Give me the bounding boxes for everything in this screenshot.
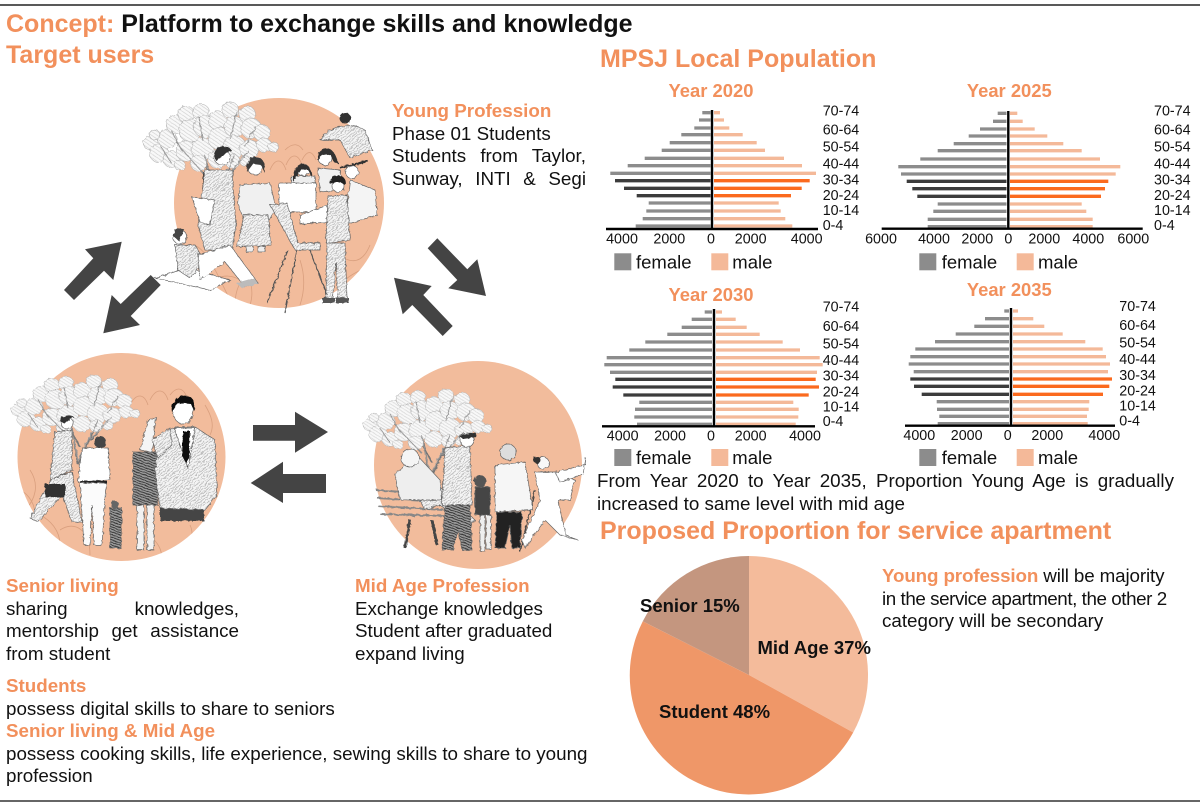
pyramid chart: year 2030: 2000	[735, 429, 767, 445]
pyramid chart: year 2020: 4000	[791, 231, 823, 247]
text block: skills exchange: possess digital skills to share to seniors	[6, 698, 335, 719]
pyramid chart: year 2035: 4000	[1088, 428, 1120, 444]
text block: senior living	[6, 575, 239, 664]
pyramid chart: year 2020: 60-64	[823, 122, 859, 138]
pyramid chart: year 2025: 50-54	[1154, 140, 1191, 156]
pyramid chart: year 2035: 50-54	[1119, 335, 1156, 351]
pyramid chart: year 2035: 2000	[951, 428, 983, 444]
pyramid chart: year 2025: 20-24	[1154, 188, 1191, 204]
text block: young profession: Students from Taylor,	[392, 145, 586, 166]
text block: skills exchange: Students	[6, 675, 86, 696]
top border line	[0, 4, 1200, 6]
pyramid chart: year 2020: female	[636, 251, 692, 272]
pyramid chart: year 2030: 4000	[789, 429, 821, 445]
text block: young profession	[392, 100, 586, 189]
pyramid chart: year 2020: male	[732, 251, 772, 272]
text block: mid age profession: Mid Age Profession	[355, 575, 530, 596]
pie chart: proposed proportion: Student 48%	[659, 701, 770, 722]
pyramid chart: year 2035: 4000	[903, 428, 935, 444]
pyramid chart: year 2030: 2000	[654, 429, 686, 445]
pyramid chart: year 2025: 6000	[865, 231, 897, 247]
text block: mid age profession	[355, 575, 552, 664]
chart title 2025: Year 2025	[967, 80, 1052, 101]
chart title 2035: Year 2035	[967, 279, 1052, 300]
text block: population finding: increased to same level with mid age	[597, 493, 905, 514]
pyramid chart: year 2035: 10-14	[1119, 399, 1156, 415]
pyramid chart: year 2020: 0	[707, 231, 715, 247]
text block: proportion note: category will be secondary	[882, 610, 1103, 631]
pyramid chart: year 2025: 10-14	[1154, 203, 1191, 219]
pyramid chart: year 2030: 60-64	[823, 319, 859, 335]
arrow: down right to mid age	[428, 238, 486, 296]
pyramid chart: year 2025: 0-4	[1154, 218, 1175, 234]
heading: population: MPSJ Local Population	[600, 45, 876, 73]
pyramid chart: year 2035: 0-4	[1119, 413, 1140, 429]
illustration: senior living group	[11, 353, 226, 561]
pyramid chart: year 2035: 0	[1004, 428, 1012, 444]
text block: mid age profession: expand living	[355, 643, 465, 664]
pyramid chart: year 2025: 6000	[1117, 231, 1149, 247]
pyramid chart: year 2020: 70-74	[823, 104, 859, 120]
pyramid chart: year 2020: 20-24	[823, 188, 859, 204]
pie chart: proposed proportion: Mid Age 37%	[758, 637, 871, 658]
text block: senior living: mentorship get assistance	[6, 620, 239, 641]
chart title 2020: Year 2020	[669, 80, 753, 101]
pyramid chart: year 2030: 0-4	[823, 414, 843, 430]
arrow: left to senior living	[251, 462, 326, 503]
pyramid chart: year 2025: 4000	[918, 231, 950, 247]
pyramid chart: year 2025: 2000	[1028, 231, 1060, 247]
pyramid chart: year 2030: 70-74	[823, 300, 859, 316]
pyramid chart: year 2025: 70-74	[1154, 104, 1191, 120]
pyramid chart: year 2025	[865, 80, 1191, 272]
pyramid chart: year 2030: 0	[707, 429, 715, 445]
text block: population finding: From Year 2020 to Year 2035, Proportion Young Age is gradually	[597, 470, 1174, 491]
pyramid chart: year 2035: 70-74	[1119, 299, 1156, 315]
pyramid chart: year 2020: 30-34	[823, 172, 859, 188]
pyramid chart: year 2030: 50-54	[823, 336, 859, 352]
pyramid chart: year 2035: 40-44	[1119, 352, 1156, 368]
pyramid chart: year 2025: 30-34	[1154, 172, 1191, 188]
pyramid chart: year 2025: male	[1038, 251, 1078, 272]
text block: mid age profession: Student after graduated	[355, 620, 552, 641]
pyramid chart: year 2025: female	[942, 251, 997, 272]
pyramid chart: year 2020: 50-54	[823, 140, 859, 156]
pyramid chart: year 2025: 40-44	[1154, 156, 1191, 172]
main title: Concept: Platform to exchange skills and knowledge	[6, 10, 633, 38]
pyramid chart: year 2030: 4000	[607, 429, 639, 445]
pie chart: proposed proportion: Senior 15%	[640, 595, 740, 616]
pyramid chart: year 2035: 30-34	[1119, 368, 1156, 384]
chart title 2030: Year 2030	[669, 284, 753, 305]
pyramid chart: year 2035	[903, 279, 1156, 468]
heading: proposed proportion: Proposed Proportion for service apartment	[600, 517, 1111, 545]
pyramid chart: year 2020: 0-4	[823, 218, 843, 234]
pyramid chart: year 2030: male	[732, 447, 772, 468]
text block: mid age profession: Exchange knowledges	[355, 598, 543, 619]
pyramid chart: year 2035: male	[1038, 447, 1078, 468]
pyramid chart: year 2025: 2000	[961, 231, 993, 247]
text block: young profession: Sunway, INTI & Segi	[392, 168, 586, 189]
pyramid chart: year 2030: 30-34	[823, 369, 859, 385]
text block: proportion note	[882, 565, 1167, 631]
arrow: right to mid age	[253, 412, 328, 453]
arrow: down left to senior living	[103, 275, 161, 333]
arrow: up left to young profession	[394, 278, 453, 336]
pyramid chart: year 2020: 10-14	[823, 203, 859, 219]
pyramid chart: year 2020: 2000	[653, 231, 685, 247]
text block: population finding	[597, 470, 1174, 514]
text block: proportion note: Young profession will be majority	[882, 565, 1164, 586]
illustration: young profession students	[143, 98, 384, 313]
text block: senior living: Senior living from student	[6, 575, 119, 664]
pyramid chart: year 2035: 20-24	[1119, 384, 1156, 400]
pyramid chart: year 2030: female	[636, 447, 692, 468]
pyramid chart: year 2030: 20-24	[823, 385, 859, 401]
pyramid chart: year 2035: 60-64	[1119, 318, 1156, 334]
heading: target users: Target users	[6, 41, 154, 69]
text block: senior living: sharing knowledges,	[6, 598, 239, 619]
pyramid chart: year 2030: 10-14	[823, 400, 859, 416]
text block: young profession: Phase 01 Students	[392, 123, 551, 144]
pyramid chart: year 2030	[602, 284, 859, 468]
pyramid chart: year 2020: 4000	[606, 231, 638, 247]
text block: proportion note: in the service apartment, the other 2	[882, 588, 1167, 609]
pyramid chart: year 2035: female	[942, 447, 997, 468]
pyramid chart: year 2020: 2000	[735, 231, 767, 247]
illustration: mid age group	[363, 361, 586, 569]
bottom border line	[0, 800, 1200, 802]
pie chart: proposed proportion	[630, 556, 871, 794]
pyramid chart: year 2020: 40-44	[823, 156, 859, 172]
text block: skills exchange: Senior living & Mid Age profession	[6, 720, 215, 786]
text block: skills exchange	[6, 675, 587, 786]
text block: skills exchange: possess cooking skills, life experience, sewing skills to share to young	[6, 743, 587, 764]
pyramid chart: year 2030: 40-44	[823, 353, 859, 369]
pyramid chart: year 2020	[606, 80, 859, 272]
pyramid chart: year 2035: 2000	[1031, 428, 1063, 444]
pyramid chart: year 2025: 0	[1004, 231, 1012, 247]
pyramid chart: year 2025: 60-64	[1154, 122, 1191, 138]
arrow: up right to young profession	[64, 242, 122, 300]
pyramid chart: year 2025: 4000	[1072, 231, 1104, 247]
text block: young profession: Young Profession	[392, 100, 551, 121]
